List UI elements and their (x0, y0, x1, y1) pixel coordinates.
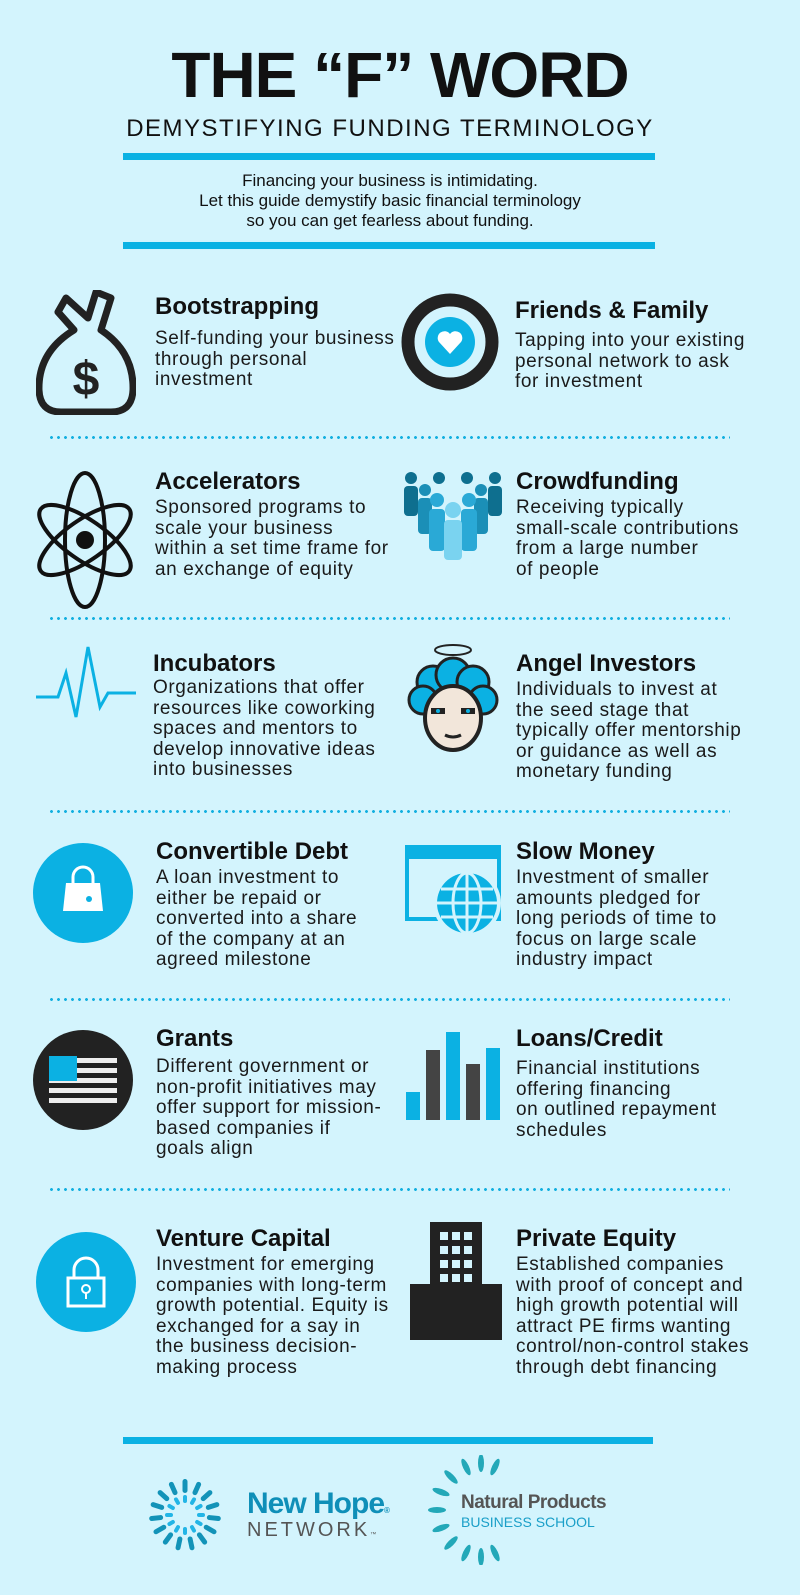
item: Friends & Family: personal network to ask (515, 350, 729, 372)
item: Private Equity: control/non-control stakes (516, 1336, 749, 1357)
item: Venture Capital: exchanged for a say in (156, 1316, 360, 1336)
item: Convertible Debt: A loan investment to (156, 867, 339, 888)
item: Convertible Debt (156, 838, 357, 970)
item: Venture Capital: Investment for emerging (156, 1254, 375, 1275)
icon: building (410, 1222, 502, 1340)
item: Angel Investors: or guidance as well as (516, 740, 717, 762)
item: Grants (156, 1025, 381, 1159)
item: Angel Investors: typically offer mentorship (516, 720, 741, 741)
logo text: New Hope Network: New Hope® (247, 1487, 389, 1520)
item: Grants: based companies if (156, 1118, 331, 1138)
item: Incubators: spaces and mentors to (153, 718, 358, 739)
item: Angel Investors: Angel Investors (516, 650, 696, 677)
subtitle: DEMYSTIFYING FUNDING TERMINOLOGY (126, 115, 654, 142)
item: Accelerators: Accelerators (155, 468, 300, 495)
icon: shopping bag circle (33, 843, 133, 943)
item: Friends & Family: Tapping into your existing (515, 330, 745, 351)
item: Loans/Credit: Financial institutions (516, 1058, 700, 1079)
logo text: New Hope Network (247, 1487, 390, 1541)
item: Accelerators (155, 468, 389, 580)
item: Convertible Debt: converted into a share (156, 908, 357, 929)
item: Crowdfunding: Receiving typically (516, 497, 684, 518)
intro text: Financing your business is intimidating. (242, 171, 538, 190)
item: Slow Money: industry impact (516, 949, 653, 970)
item: Incubators (153, 650, 376, 780)
item: Angel Investors: Individuals to invest at (516, 679, 717, 700)
item: Venture Capital: companies with long-term (156, 1274, 387, 1296)
item: Private Equity: attract PE firms wanting (516, 1316, 731, 1336)
icon: money bag (36, 290, 136, 415)
item: Accelerators: scale your business (155, 518, 333, 538)
item: Incubators: develop innovative ideas (153, 738, 376, 760)
icon: lock circle (36, 1232, 136, 1332)
item: Friends & Family: Friends & Family (515, 297, 708, 324)
item: Convertible Debt: Convertible Debt (156, 838, 348, 865)
item: Crowdfunding: of people (516, 558, 600, 580)
item: Crowdfunding: Crowdfunding (516, 468, 679, 495)
item: Angel Investors: monetary funding (516, 761, 672, 782)
intro text: Let this guide demystify basic financial terminology (199, 191, 581, 210)
item: Slow Money: long periods of time to (516, 908, 717, 929)
item: Grants: Different government or (156, 1056, 369, 1077)
item: Incubators: Organizations that offer (153, 677, 365, 698)
item: Grants: goals align (156, 1138, 253, 1159)
item: Loans/Credit: schedules (516, 1120, 607, 1140)
item: Angel Investors (516, 650, 741, 782)
icon: atom (37, 471, 133, 609)
title: THE “F” WORD (171, 39, 629, 111)
icon: flag circle (33, 1030, 133, 1130)
item: Private Equity (516, 1225, 749, 1378)
item: Grants: Grants (156, 1025, 233, 1052)
item: Grants: non-profit initiatives may (156, 1076, 376, 1098)
intro text: so you can get fearless about funding. (246, 211, 534, 230)
item: Venture Capital: making process (156, 1356, 297, 1378)
item: Slow Money: Investment of smaller (516, 867, 709, 888)
item: Incubators: into businesses (153, 759, 293, 780)
item: Crowdfunding: from a large number (516, 538, 698, 559)
item: Bootstrapping (155, 293, 395, 390)
item: Loans/Credit: on outlined repayment (516, 1099, 717, 1120)
item: Friends & Family: for investment (515, 371, 643, 392)
item: Angel Investors: the seed stage that (516, 700, 689, 720)
icon: money bag: $ (73, 353, 100, 406)
item: Bootstrapping: Bootstrapping (155, 293, 319, 320)
item: Slow Money (516, 838, 717, 970)
item: Accelerators: an exchange of equity (155, 558, 354, 580)
item: Crowdfunding (516, 468, 739, 580)
intro text (199, 171, 581, 230)
item: Venture Capital: the business decision- (156, 1336, 357, 1357)
item: Bootstrapping: investment (155, 369, 253, 390)
item: Crowdfunding: small-scale contributions (516, 518, 739, 538)
item: Convertible Debt: of the company at an (156, 928, 345, 950)
item: Accelerators: within a set time frame for (155, 538, 389, 559)
item: Loans/Credit: Loans/Credit (516, 1025, 663, 1052)
item: Bootstrapping: through personal (155, 348, 307, 370)
icon: heartbeat (36, 646, 136, 718)
item: Venture Capital: growth potential. Equity is (156, 1295, 389, 1316)
item: Grants: offer support for mission- (156, 1097, 381, 1118)
logo: Natural Products sunburst (428, 1455, 500, 1565)
item: Private Equity: Private Equity (516, 1225, 676, 1252)
item: Incubators: Incubators (153, 650, 276, 677)
item: Slow Money: amounts pledged for (516, 888, 701, 908)
logo text: Natural Products (461, 1492, 606, 1530)
item: Private Equity: with proof of concept and (516, 1274, 743, 1296)
item: Convertible Debt: agreed milestone (156, 949, 311, 970)
item: Slow Money: focus on large scale (516, 928, 697, 950)
item: Loans/Credit (516, 1025, 717, 1140)
logo text: Natural Products: BUSINESS SCHOOL (461, 1514, 595, 1530)
logo: New Hope sunburst (149, 1479, 221, 1550)
item: Friends & Family (515, 297, 745, 392)
icon: heart target (402, 294, 498, 390)
icon: angel (408, 644, 498, 752)
item: Incubators: resources like coworking (153, 698, 375, 718)
item: Slow Money: Slow Money (516, 838, 655, 865)
item: Private Equity: through debt financing (516, 1356, 717, 1378)
item: Loans/Credit: offering financing (516, 1078, 671, 1100)
logo text: Natural Products: Natural Products (461, 1492, 606, 1513)
item: Private Equity: Established companies (516, 1254, 724, 1275)
item: Accelerators: Sponsored programs to (155, 497, 366, 518)
icon: bar chart (406, 1032, 500, 1120)
icon: crowd (404, 472, 502, 560)
item: Venture Capital: Venture Capital (156, 1225, 331, 1252)
icon: browser globe (405, 845, 501, 933)
logo text: New Hope Network: NETWORK™ (247, 1519, 379, 1541)
item: Bootstrapping: Self-funding your business (155, 328, 395, 349)
item: Private Equity: high growth potential will (516, 1295, 739, 1316)
item: Venture Capital (156, 1225, 389, 1378)
item: Convertible Debt: either be repaid or (156, 888, 322, 908)
